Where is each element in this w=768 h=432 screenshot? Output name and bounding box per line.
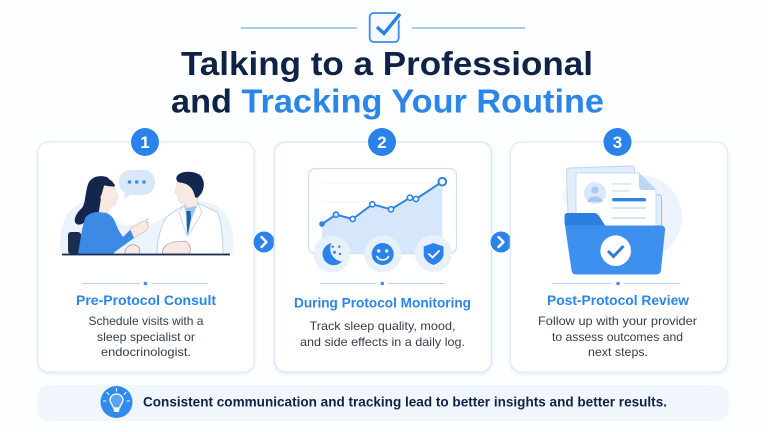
callout text: Consistent communication and tracking lead to better insights and better results. <box>143 395 667 410</box>
arrow 2 <box>490 231 512 253</box>
divider <box>82 282 208 285</box>
step badge 2 <box>368 128 396 156</box>
panel: pre-protocol consult <box>38 128 254 372</box>
step badge 1: 1 <box>140 133 150 152</box>
illustration: patient and doctor consult <box>60 170 233 255</box>
step badge 1 <box>131 128 159 156</box>
title <box>171 45 604 120</box>
body text: next steps. <box>588 345 648 359</box>
icon: moon and stars <box>314 236 350 272</box>
title: and Tracking Your Routine <box>171 82 604 120</box>
body text: Follow up with your provider <box>538 314 697 328</box>
panel: post-protocol review <box>510 128 728 372</box>
body text <box>300 319 465 349</box>
panel: during protocol monitoring <box>274 128 492 372</box>
body text: Track sleep quality, mood, <box>310 319 456 333</box>
step badge 3 <box>604 128 632 156</box>
body text: sleep specialist or <box>97 330 195 344</box>
divider <box>552 282 680 285</box>
callout bar <box>37 385 729 421</box>
illustration: folder with documents <box>562 166 682 274</box>
arrow 1 <box>253 231 275 253</box>
heading: During Protocol Monitoring <box>294 294 471 310</box>
icon: shield check <box>415 235 452 272</box>
speech bubble <box>119 170 155 199</box>
header ornament <box>241 13 525 42</box>
step badge 3: 3 <box>613 133 622 152</box>
icon: light bulb <box>100 386 132 418</box>
body text <box>538 314 697 359</box>
icon: smiley <box>364 236 401 272</box>
line chart <box>308 168 456 254</box>
body text: and side effects in a daily log. <box>300 335 465 349</box>
step badge 2: 2 <box>377 133 387 152</box>
body text: endocrinologist. <box>101 345 191 359</box>
title: Talking to a Professional <box>181 45 593 82</box>
body text <box>88 314 204 359</box>
body text: Schedule visits with a <box>88 314 204 328</box>
divider <box>320 282 445 285</box>
heading: Pre-Protocol Consult <box>76 292 216 308</box>
body text: to assess outcomes and <box>552 330 683 344</box>
heading: Post-Protocol Review <box>547 292 689 308</box>
